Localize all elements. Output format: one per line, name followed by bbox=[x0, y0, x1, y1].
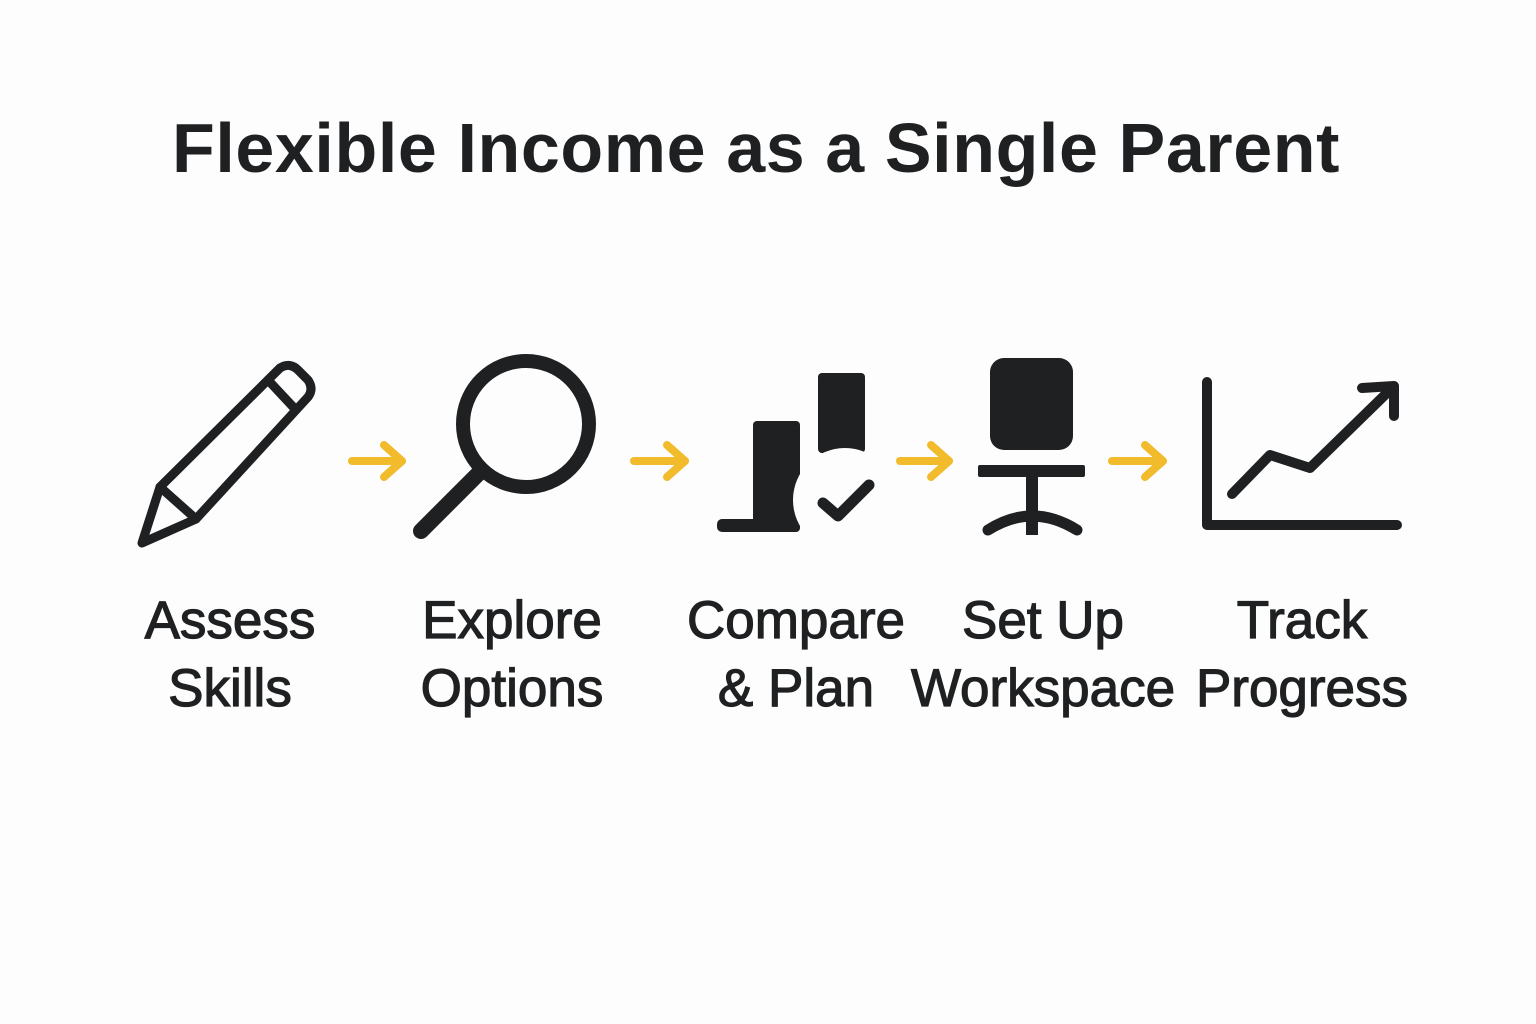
icon: magnifier bbox=[421, 361, 589, 531]
label: Assess Skills: Assess bbox=[145, 591, 315, 650]
label: Track Progress: Track bbox=[1237, 591, 1367, 650]
arrow 3 bbox=[900, 445, 949, 477]
arrow 4 bbox=[1112, 445, 1163, 477]
icon: chair bbox=[978, 358, 1085, 535]
label: Set Up Workspace: Set Up bbox=[962, 591, 1124, 650]
label: Compare & Plan: & Plan bbox=[718, 659, 874, 718]
icon: growth chart bbox=[1207, 382, 1397, 525]
label: Assess Skills bbox=[144, 591, 315, 718]
label: Explore Options bbox=[421, 591, 603, 718]
label: Set Up Workspace: Workspace bbox=[911, 659, 1175, 718]
label: Set Up Workspace bbox=[910, 591, 1175, 718]
label: Explore Options: Options bbox=[421, 659, 603, 718]
label: Track Progress bbox=[1196, 591, 1408, 718]
label: Compare & Plan bbox=[687, 591, 905, 718]
arrow 2 bbox=[634, 445, 685, 477]
arrow 1 bbox=[352, 445, 402, 477]
label: Track Progress: Progress bbox=[1196, 659, 1408, 718]
label: Assess Skills: Skills bbox=[168, 659, 292, 718]
label: Compare & Plan: Compare bbox=[687, 591, 905, 650]
label: Explore Options: Explore bbox=[422, 591, 602, 650]
icon: compare chart bbox=[717, 373, 897, 552]
title: Flexible Income as a Single Parent bbox=[172, 109, 1340, 187]
icon: pencil bbox=[142, 365, 311, 543]
